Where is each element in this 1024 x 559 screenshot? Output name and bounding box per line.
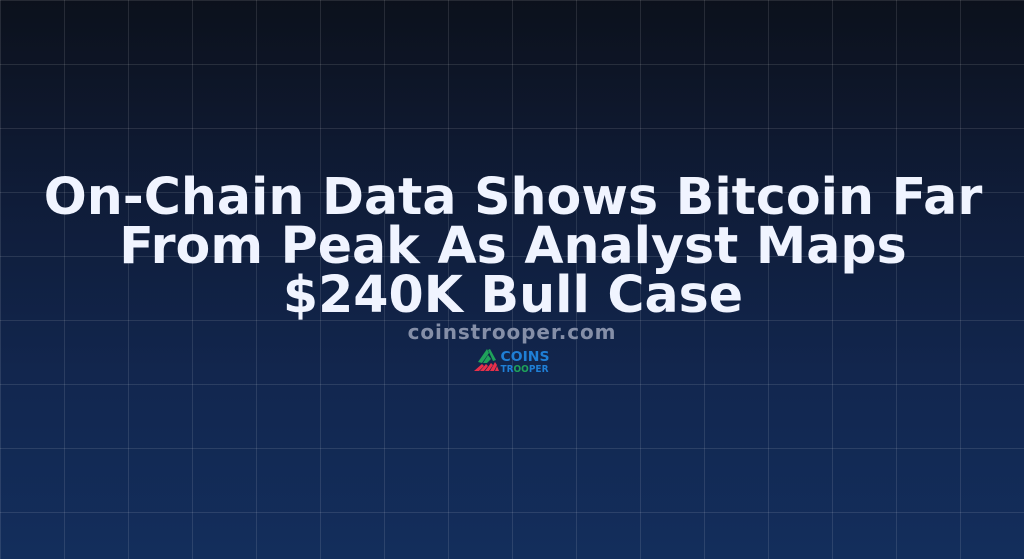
logo: Coins Trooper	[474, 349, 550, 375]
logo text: COINS: COINS	[500, 349, 550, 365]
title: From Peak As Analyst Maps	[119, 216, 907, 275]
title: $240K Bull Case	[283, 265, 743, 324]
logo text: TROOPER: TROOPER	[500, 364, 549, 375]
title: On-Chain Data Shows Bitcoin Far	[44, 167, 982, 226]
title	[44, 167, 982, 324]
icon: green and red mountain bars	[474, 349, 499, 371]
website label: coinstrooper.com	[408, 320, 616, 344]
